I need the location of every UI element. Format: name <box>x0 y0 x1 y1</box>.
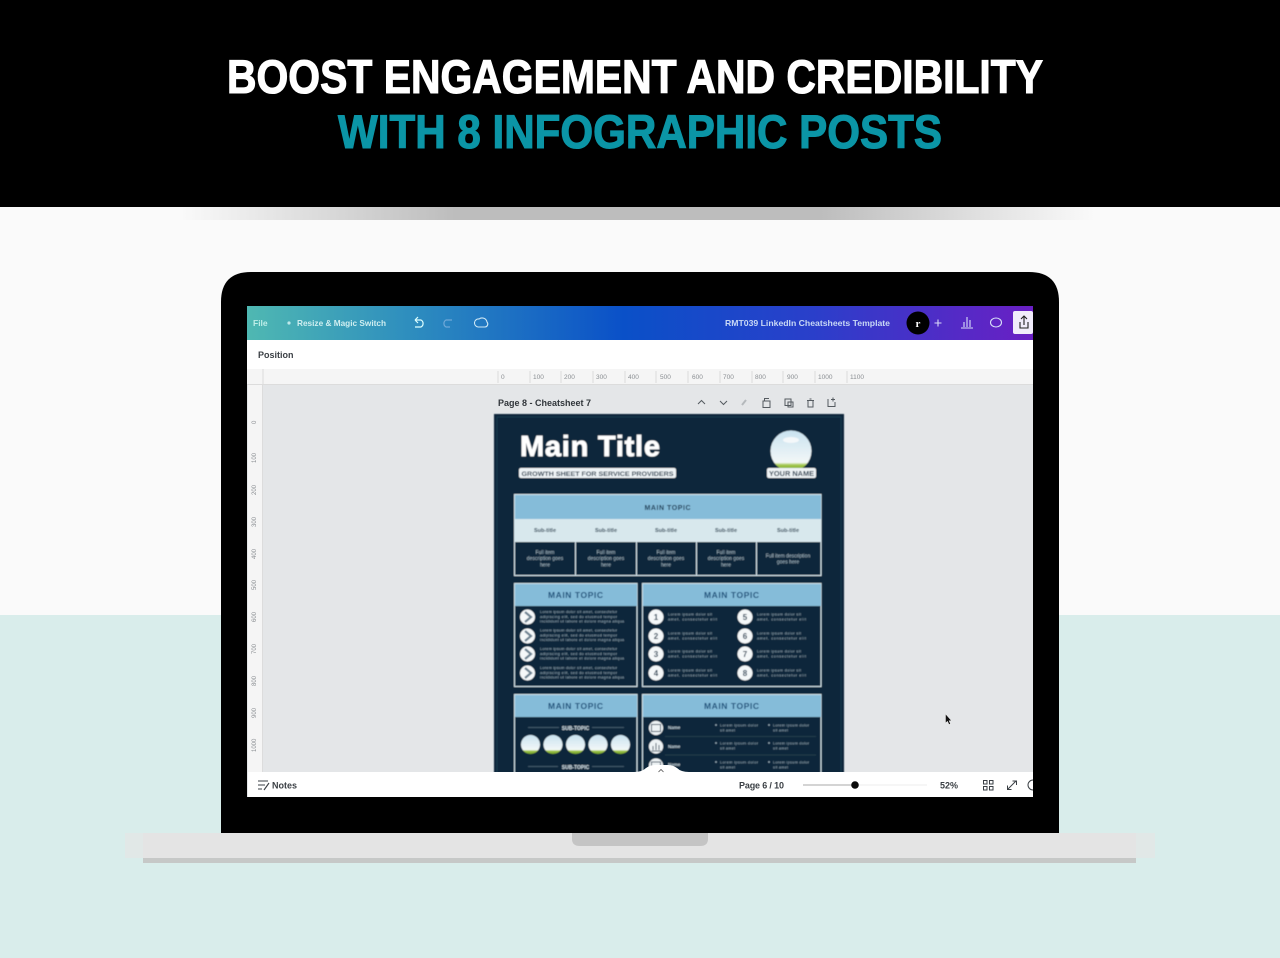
panel: icon rows: Lorem ipsum dolor <box>773 742 810 746</box>
panel: image gallery: SUB-TOPIC <box>562 765 590 771</box>
title: BOOST ENGAGEMENT AND CREDIBILITY <box>227 50 1043 103</box>
panel: icon rows: sit amet <box>720 728 736 732</box>
panel: icon rows: sit amet <box>720 766 736 770</box>
editor top bar: RMT039 LinkedIn Cheatsheets Template <box>725 318 890 328</box>
table panel: here <box>721 562 731 568</box>
horizontal ruler <box>247 369 1033 385</box>
bottom status bar: Page 6 / 10 <box>739 780 784 790</box>
editor top bar <box>247 306 1033 340</box>
table panel: Full item <box>657 550 675 556</box>
context toolbar <box>247 340 1033 369</box>
vertical ruler: 0 <box>252 420 258 424</box>
horizontal ruler: 800 <box>755 374 766 381</box>
panel: numbered list: amet, consectetur elit <box>668 618 718 622</box>
panel: numbered list: Lorem ipsum dolor sit <box>668 612 713 616</box>
table panel <box>514 494 821 576</box>
panel: arrow list: incididunt ut labore et dolore magna aliqua <box>540 620 625 624</box>
panel: icon rows: Lorem ipsum dolor <box>720 760 759 764</box>
panel: icon rows: Name <box>668 762 681 767</box>
table panel: goes here <box>777 560 799 566</box>
vertical ruler: 1000 <box>252 738 258 752</box>
panel: numbered list: amet, consectetur elit <box>668 674 718 678</box>
panel: arrow list: Lorem ipsum dolor sit amet, consectetur <box>540 610 618 614</box>
panel: numbered list: amet, consectetur elit <box>757 654 807 658</box>
table panel: Sub-title <box>534 528 556 534</box>
table panel: description goes <box>648 556 685 562</box>
mouse cursor <box>946 714 952 724</box>
logo placeholder: YOUR NAME <box>769 471 814 478</box>
panel: numbered list: Lorem ipsum dolor sit <box>757 668 802 672</box>
header shadow <box>180 207 1095 220</box>
panel: arrow list <box>514 584 637 686</box>
table panel: Full item description <box>766 554 810 560</box>
panel: arrow list: adipiscing elit, sed do eiusmod tempor <box>540 671 618 675</box>
panel: numbered list: Lorem ipsum dolor sit <box>757 632 802 636</box>
table panel: Sub-title <box>715 528 737 534</box>
panel: icon rows: Lorem ipsum dolor <box>720 724 759 728</box>
horizontal ruler: 100 <box>533 374 544 381</box>
panel: numbered list: 3 <box>654 650 659 659</box>
panel: arrow list: Lorem ipsum dolor sit amet, consectetur <box>540 647 618 651</box>
laptop base <box>125 833 1155 863</box>
panel: arrow list: incididunt ut labore et dolore magna aliqua <box>540 638 625 642</box>
editor top bar: Resize & Magic Switch <box>297 318 386 328</box>
vertical ruler: 200 <box>252 484 258 495</box>
panel: numbered list: 1 <box>654 613 659 622</box>
laptop bezel <box>221 272 1059 833</box>
horizontal ruler: 1100 <box>850 374 864 381</box>
panel: numbered list <box>642 584 821 686</box>
bottom status bar: Notes <box>272 780 297 790</box>
title: WITH 8 INFOGRAPHIC POSTS <box>338 105 942 158</box>
table panel: Full item <box>536 550 554 556</box>
horizontal ruler: 1000 <box>818 374 833 381</box>
panel: icon rows: sit amet <box>773 746 789 750</box>
bottom status bar <box>248 765 1033 797</box>
table panel: Sub-title <box>595 528 617 534</box>
vertical ruler: 400 <box>252 548 258 559</box>
vertical ruler: 800 <box>252 675 258 686</box>
panel: numbered list: 5 <box>743 613 748 622</box>
vertical ruler: 300 <box>252 516 258 527</box>
panel: numbered list: Lorem ipsum dolor sit <box>668 632 713 636</box>
table panel: MAIN TOPIC <box>644 505 690 512</box>
panel: numbered list: 8 <box>743 669 748 678</box>
document subtitle pill: GROWTH SHEET FOR SERVICE PROVIDERS <box>522 471 674 478</box>
panel: icon rows: sit amet <box>720 746 736 750</box>
panel: icon rows: sit amet <box>773 766 789 770</box>
page action icons <box>698 398 835 408</box>
table panel: description goes <box>527 556 564 562</box>
panel: numbered list: amet, consectetur elit <box>757 636 807 640</box>
table panel: description goes <box>708 556 745 562</box>
panel: icon rows: sit amet <box>773 728 789 732</box>
horizontal ruler: 300 <box>596 374 607 381</box>
horizontal ruler: 700 <box>723 374 734 381</box>
vertical ruler <box>248 385 263 772</box>
panel: numbered list: Lorem ipsum dolor sit <box>668 668 713 672</box>
panel: arrow list: adipiscing elit, sed do eiusmod tempor <box>540 652 618 656</box>
vertical ruler: 700 <box>252 643 258 654</box>
panel: image gallery: SUB-TOPIC <box>562 726 590 732</box>
panel: arrow list: Lorem ipsum dolor sit amet, consectetur <box>540 628 618 632</box>
panel: icon rows <box>641 693 822 772</box>
document: cheatsheet template <box>494 414 844 794</box>
table panel: Sub-title <box>777 528 799 534</box>
table panel: here <box>661 562 671 568</box>
panel: arrow list: adipiscing elit, sed do eiusmod tempor <box>540 615 618 619</box>
panel: image gallery: MAIN TOPIC <box>548 701 603 711</box>
table panel: Full item <box>597 550 615 556</box>
panel: numbered list: 4 <box>654 669 659 678</box>
panel: numbered list: Lorem ipsum dolor sit <box>757 612 802 616</box>
context toolbar: Position <box>258 350 294 360</box>
title <box>227 50 1043 158</box>
panel: numbered list: Lorem ipsum dolor sit <box>668 650 713 654</box>
background: upper light area <box>0 207 1280 615</box>
editor top bar: r <box>916 318 921 330</box>
panel: image gallery <box>513 693 638 772</box>
table panel: here <box>540 562 550 568</box>
vertical ruler: 900 <box>252 707 258 718</box>
panel: icon rows: Lorem ipsum dolor <box>773 760 810 764</box>
panel: numbered list: MAIN TOPIC <box>704 590 759 600</box>
panel: numbered list: amet, consectetur elit <box>668 654 718 658</box>
horizontal ruler: 200 <box>564 374 575 381</box>
panel: icon rows: Name <box>668 725 681 730</box>
panel: numbered list: 2 <box>654 632 659 641</box>
panel: numbered list: 6 <box>743 632 748 641</box>
panel: icon rows: Lorem ipsum dolor <box>720 742 759 746</box>
horizontal ruler: 500 <box>660 374 671 381</box>
document subtitle pill <box>519 468 676 478</box>
horizontal ruler: 900 <box>787 374 798 381</box>
table panel: here <box>601 562 611 568</box>
page label: Page 8 - Cheatsheet 7 <box>498 398 591 408</box>
table panel: Sub-title <box>655 528 677 534</box>
horizontal ruler: 600 <box>692 374 703 381</box>
bottom status bar: 52% <box>940 780 958 790</box>
vertical ruler: 100 <box>252 452 258 463</box>
vertical ruler: 500 <box>252 579 258 590</box>
panel: arrow list: Lorem ipsum dolor sit amet, consectetur <box>540 666 618 670</box>
horizontal ruler: 0 <box>501 374 505 381</box>
vertical ruler: 600 <box>252 611 258 622</box>
panel: arrow list: incididunt ut labore et dolore magna aliqua <box>540 676 625 680</box>
panel: numbered list: Lorem ipsum dolor sit <box>757 650 802 654</box>
table panel: description goes <box>588 556 625 562</box>
panel: numbered list: 7 <box>743 650 748 659</box>
panel: arrow list: incididunt ut labore et dolore magna aliqua <box>540 656 625 660</box>
table panel: Full item <box>717 550 735 556</box>
background: lower mint area <box>0 615 1280 958</box>
logo placeholder <box>767 430 816 478</box>
header band <box>0 0 1280 207</box>
editor top bar: File <box>253 318 268 328</box>
panel: icon rows: Lorem ipsum dolor <box>773 724 810 728</box>
document title: Main Title <box>520 431 660 463</box>
panel: arrow list: adipiscing elit, sed do eiusmod tempor <box>540 634 618 638</box>
screen: editor interface <box>247 306 1033 797</box>
panel: arrow list: MAIN TOPIC <box>548 590 603 600</box>
panel: icon rows: Name <box>668 744 681 749</box>
panel: numbered list: amet, consectetur elit <box>757 618 807 622</box>
panel: numbered list: amet, consectetur elit <box>757 674 807 678</box>
panel: numbered list: amet, consectetur elit <box>668 636 718 640</box>
panel: icon rows: MAIN TOPIC <box>704 701 759 711</box>
horizontal ruler: 400 <box>628 374 639 381</box>
